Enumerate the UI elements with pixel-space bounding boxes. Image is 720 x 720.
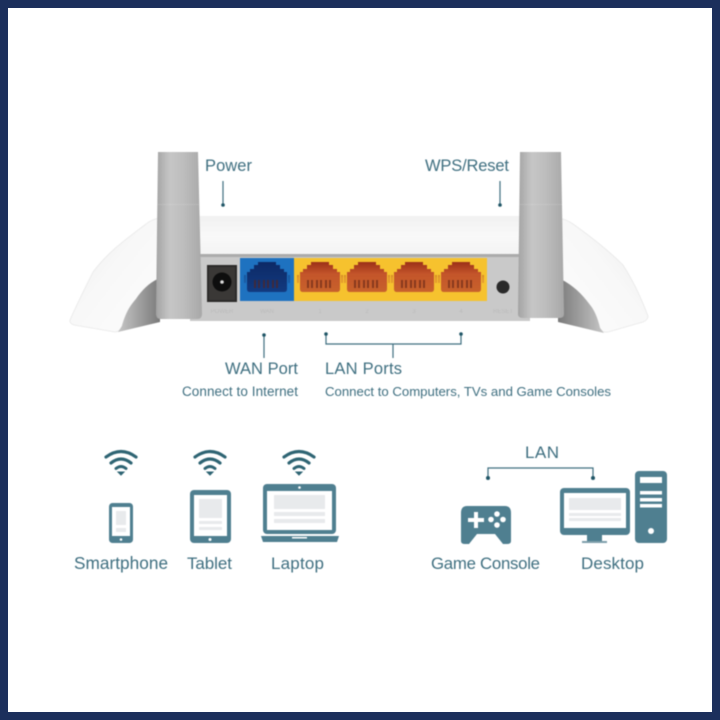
LAN bracket xyxy=(486,443,595,480)
label: WAN Port: Connect to Internet xyxy=(182,384,298,399)
device: desktop: Desktop xyxy=(581,554,644,573)
label: WPS/Reset: WPS/Reset xyxy=(425,157,509,175)
label: Power xyxy=(205,157,252,207)
icon: wifi xyxy=(106,452,136,475)
label: WAN Port xyxy=(182,333,298,399)
faint port labels: 3 xyxy=(412,309,416,315)
icon: laptop xyxy=(261,484,339,542)
icon: monitor xyxy=(560,488,630,543)
icon: tablet xyxy=(190,490,231,543)
label: LAN Ports xyxy=(324,332,611,399)
device: smartphone xyxy=(74,452,168,573)
left antenna xyxy=(156,152,202,319)
icon: game controller xyxy=(461,506,511,544)
LAN ports xyxy=(294,258,487,301)
label: WPS/Reset xyxy=(425,157,509,207)
device: game console: Game Console xyxy=(431,554,540,573)
router rear panel xyxy=(190,254,530,321)
device: tablet: Tablet xyxy=(187,554,232,573)
faint port labels: WAN xyxy=(260,309,274,315)
faint port labels: 4 xyxy=(459,309,463,315)
device: laptop xyxy=(261,452,339,573)
faint port labels: POWER xyxy=(211,309,234,315)
icon: wifi xyxy=(195,452,225,475)
infographic content xyxy=(70,152,667,573)
right antenna xyxy=(518,152,564,318)
label: Power: Power xyxy=(205,157,252,175)
label: WAN Port: WAN Port xyxy=(225,360,298,378)
device: desktop xyxy=(560,471,667,573)
router top cover xyxy=(190,216,530,256)
icon: wifi xyxy=(284,452,314,475)
device: smartphone: Smartphone xyxy=(74,553,168,573)
router wing shadows xyxy=(118,278,160,332)
icon: smartphone xyxy=(109,503,133,543)
device: tablet xyxy=(187,452,232,573)
label: LAN Ports: LAN Ports xyxy=(325,360,402,378)
power socket xyxy=(207,265,237,302)
faint port labels: RESET xyxy=(493,309,513,315)
router left wing xyxy=(70,218,160,332)
faint port labels: 2 xyxy=(365,309,369,315)
faint port labels xyxy=(211,309,513,315)
LAN bracket: LAN xyxy=(525,443,559,462)
reset button xyxy=(496,280,510,294)
device: game console xyxy=(431,506,540,573)
device: laptop: Laptop xyxy=(271,554,324,573)
icon: computer tower xyxy=(635,471,667,543)
router right wing xyxy=(558,218,648,332)
WAN port xyxy=(240,258,294,301)
router photo xyxy=(70,152,648,333)
faint port labels: 1 xyxy=(318,309,322,315)
label: LAN Ports: Connect to Computers, TVs and Game Consoles xyxy=(325,384,611,399)
